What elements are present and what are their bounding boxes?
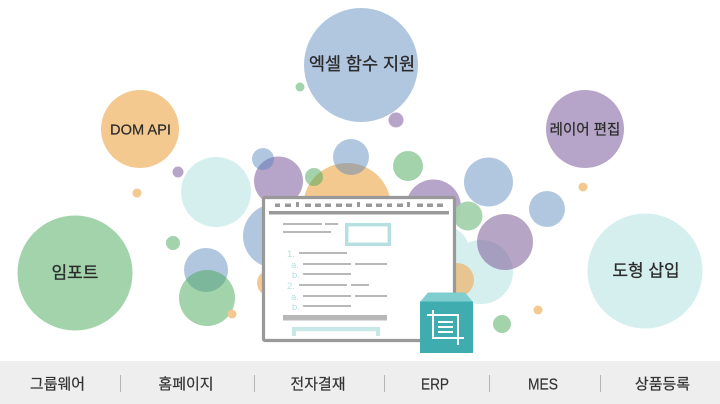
bottom menu bar: 홈페이지	[158, 375, 214, 393]
bubble: DOM API	[101, 90, 179, 168]
ruler ticks	[269, 202, 449, 214]
numbered list markers: a.	[291, 260, 299, 271]
bubble: 도형 삽입: 도형 삽입	[612, 262, 680, 280]
bubble: 레이어 편집	[546, 90, 624, 168]
bubble: 레이어 편집: 레이어 편집	[550, 122, 620, 138]
numbered list markers: a.	[291, 292, 299, 303]
background bubbles	[132, 82, 588, 333]
bottom menu bar: ERP	[421, 376, 449, 394]
numbered list markers: b.	[292, 270, 300, 281]
bottom menu bar: MES	[528, 376, 558, 394]
text lines	[283, 223, 387, 320]
bubble: 엑셀 함수 지원	[304, 8, 418, 122]
bubble: 임포트: 임포트	[52, 264, 98, 282]
bubble: DOM API: DOM API	[110, 122, 171, 138]
numbered list markers	[287, 249, 300, 313]
numbered list markers: 2.	[287, 281, 295, 292]
bubble: 엑셀 함수 지원: 엑셀 함수 지원	[309, 54, 415, 74]
footer bracket	[292, 327, 380, 336]
bubble: 임포트	[18, 216, 132, 330]
image placeholder	[347, 225, 389, 244]
document window illustration	[264, 198, 454, 340]
bubble: 도형 삽입	[588, 214, 702, 328]
bottom menu bar: 그룹웨어	[30, 376, 85, 393]
bottom menu bar: 상품등록	[635, 376, 690, 393]
bottom menu bar: 전자결재	[290, 376, 346, 393]
numbered list markers: 1.	[287, 249, 295, 260]
bottom menu bar	[0, 361, 720, 404]
icon: crop tool box	[420, 292, 473, 353]
numbered list markers: b.	[292, 302, 300, 313]
